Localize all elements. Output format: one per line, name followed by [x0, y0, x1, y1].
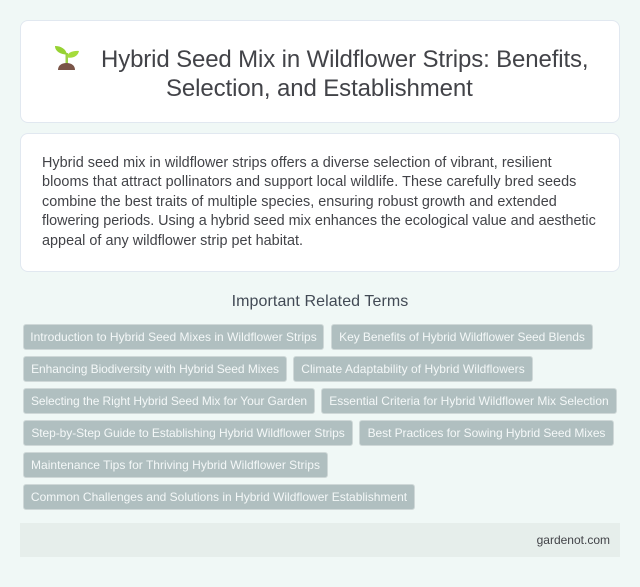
tag [23, 420, 353, 446]
tag [23, 452, 328, 478]
tag [321, 388, 617, 414]
icon: seedling [55, 46, 79, 70]
tag: Enhancing Biodiversity with Hybrid Seed Mixes [31, 362, 279, 376]
intro text: Hybrid seed mix in wildflower strips offers a diverse selection of vibrant, resilient [42, 155, 552, 171]
intro text: blooms that attract pollinators and support local wildlife. These carefully bred seeds [42, 174, 576, 190]
tag [23, 484, 415, 510]
tag: Step-by-Step Guide to Establishing Hybrid Wildflower Strips [31, 426, 345, 440]
tag: Essential Criteria for Hybrid Wildflower Mix Selection [329, 394, 609, 408]
title: Hybrid Seed Mix in Wildflower Strips: Benefits, [101, 46, 588, 73]
tag [23, 324, 324, 350]
tag: Climate Adaptability of Hybrid Wildflowers [301, 362, 525, 376]
intro panel [20, 133, 620, 272]
tag: Common Challenges and Solutions in Hybrid Wildflower Establishment [31, 490, 407, 504]
title: Selection, and Establishment [166, 75, 473, 102]
tag: Selecting the Right Hybrid Seed Mix for Your Garden [31, 394, 307, 408]
intro text: combine the best traits of multiple species, ensuring robust growth and extended [42, 194, 557, 210]
tag [23, 356, 287, 382]
intro text [42, 155, 596, 249]
tag [359, 420, 614, 446]
tag: Key Benefits of Hybrid Wildflower Seed Blends [339, 330, 585, 344]
title [101, 46, 588, 102]
tag: Introduction to Hybrid Seed Mixes in Wildflower Strips [30, 330, 317, 344]
tag: Maintenance Tips for Thriving Hybrid Wildflower Strips [31, 458, 320, 472]
intro text: flowering periods. Using a hybrid seed mix enhances the ecological value and aesthetic [42, 213, 596, 229]
header card [20, 20, 620, 123]
footer bar [20, 523, 620, 557]
tag [293, 356, 533, 382]
footer source: gardenot.com [537, 533, 610, 547]
tag [23, 388, 315, 414]
related terms tags [23, 324, 617, 510]
intro text: appeal of any wildflower strip pet habitat. [42, 233, 303, 249]
related terms heading: Important Related Terms [232, 293, 408, 310]
tag: Best Practices for Sowing Hybrid Seed Mixes [368, 426, 605, 440]
tag [331, 324, 593, 350]
